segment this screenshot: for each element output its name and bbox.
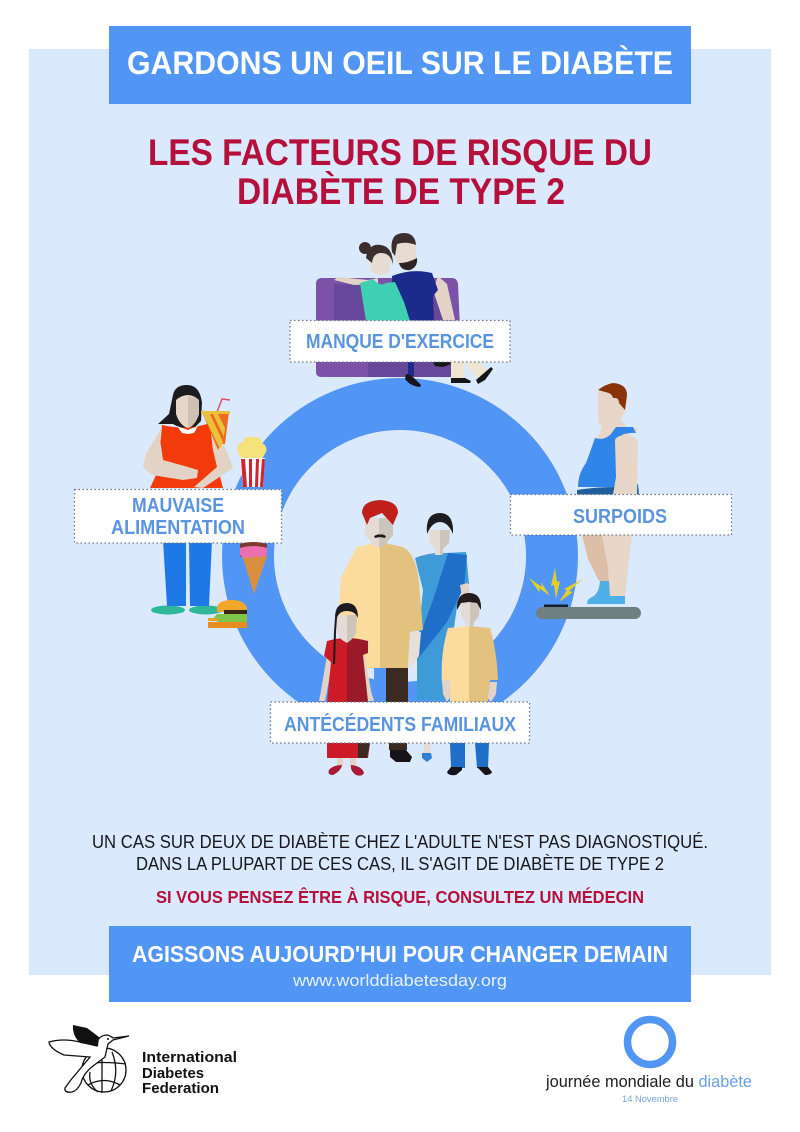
label: manque d'exercice [290,320,510,362]
label: mauvaise alimentation: ALIMENTATION [111,517,245,539]
text block: undiagnosed cases [92,832,708,874]
bottom banner: www.worlddiabetesday.org [292,971,507,990]
logo: International Diabetes Federation: Federation [142,1081,219,1097]
logo: journée mondiale du diabète: journée mondiale du diabète [545,1073,752,1091]
label: surpoids [510,494,732,535]
logo: journée mondiale du diabète: 14 Novembre [622,1094,678,1104]
callout: consult a doctor: SI VOUS PENSEZ ÊTRE À RISQUE, CONSULTEZ UN MÉDECIN [156,886,644,907]
girl [319,603,374,776]
figure: overweight man on scale [529,383,641,619]
title: LES FACTEURS DE RISQUE DU [148,132,652,173]
figure: person with poor diet [143,385,233,614]
logo: journée mondiale du diabète [545,1020,752,1104]
mother [415,513,470,762]
icon: burger [208,600,247,628]
icon: popcorn [237,437,266,487]
label: antécédents familiaux [270,702,530,743]
text block: undiagnosed cases: UN CAS SUR DEUX DE DIABÈTE CHEZ L'ADULTE N'EST PAS DIAGNOSTIQUÉ. [92,832,708,852]
blue ring [248,404,552,708]
boy [442,593,498,775]
label: manque d'exercice: MANQUE D'EXERCICE [306,331,494,353]
label: antécédents familiaux: ANTÉCÉDENTS FAMILIAUX [284,713,517,736]
figure: family [319,500,498,776]
text block: undiagnosed cases: DANS LA PLUPART DE CES CAS, IL S'AGIT DE DIABÈTE DE TYPE 2 [136,854,664,874]
top banner: GARDONS UN OEIL SUR LE DIABÈTE [127,45,673,81]
logo: International Diabetes Federation [49,1025,237,1097]
icon: ice cream [240,542,267,594]
logo: International Diabetes Federation: Diabetes [142,1066,204,1082]
label: mauvaise alimentation [74,490,282,543]
title [148,132,652,212]
logo: International Diabetes Federation: International [142,1050,237,1066]
top banner [109,26,691,104]
father [338,500,423,762]
title: DIABÈTE DE TYPE 2 [237,171,565,212]
figure: couple on sofa [316,233,493,387]
bottom banner: AGISSONS AUJOURD'HUI POUR CHANGER DEMAIN [132,941,668,967]
bottom banner [109,926,691,1002]
panel: light blue background [29,49,771,975]
icon: hummingbird and globe [49,1025,129,1093]
icon: soft drink [201,399,230,450]
label: surpoids: SURPOIDS [573,506,667,528]
label: mauvaise alimentation: MAUVAISE [132,495,224,517]
